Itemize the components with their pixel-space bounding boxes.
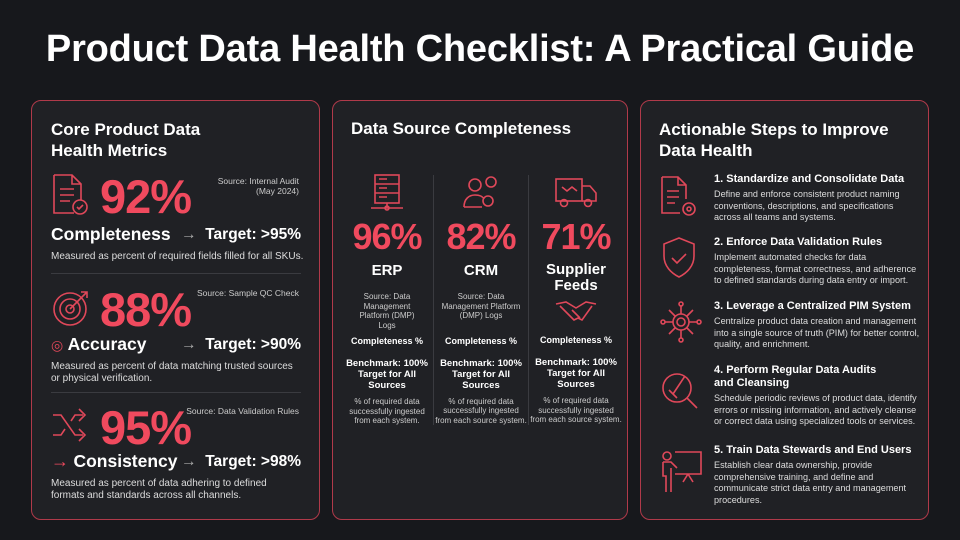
column: supplier feeds: Completeness % <box>540 335 612 345</box>
step 2 <box>663 236 916 285</box>
step 1 <box>661 173 904 222</box>
icon: shuffle <box>53 408 86 442</box>
column: CRM: Completeness % <box>445 336 517 346</box>
label: completeness: → Target: >95% <box>181 226 301 242</box>
heading: steps: Data Health <box>659 141 753 160</box>
column: supplier feeds: Supplier <box>546 261 606 278</box>
column: CRM: Benchmark: 100% <box>440 358 522 368</box>
column: CRM: Source: Data <box>458 292 504 301</box>
column: ERP: Completeness % <box>351 336 423 346</box>
label: completeness: Completeness <box>51 224 171 244</box>
heading: core metrics <box>51 120 200 160</box>
icon: truck <box>555 178 597 208</box>
step 5: Establish clear data ownership, provide comprehensive training, and define and communicate strict data entry and management procedures. <box>714 460 906 504</box>
label: accuracy: ◎ Accuracy <box>51 334 146 354</box>
desc: consistency: Measured as percent of data adhering to defined formats and standards across all channels. <box>51 478 267 501</box>
icon: document check <box>53 174 88 215</box>
panel: core metrics <box>31 100 320 520</box>
label: accuracy <box>51 334 301 354</box>
step 4: and Cleansing <box>714 377 789 389</box>
icon: target <box>53 291 88 326</box>
label: accuracy: → Target: >90% <box>181 336 301 352</box>
step 5 <box>662 444 912 505</box>
heading: steps: Actionable Steps to Improve <box>659 120 889 139</box>
column: CRM: (DMP) Logs <box>460 311 502 320</box>
source: internal audit: Source: Internal Audit <box>218 176 299 186</box>
title: Product Data Health Checklist: A Practical Guide <box>46 28 914 70</box>
label: completeness <box>51 224 301 244</box>
step 1: 1. Standardize and Consolidate Data <box>714 173 904 185</box>
column: ERP: Logs <box>378 320 396 330</box>
column: ERP: Target for All <box>358 369 416 380</box>
label: consistency <box>51 451 301 471</box>
column: supplier feeds: % of required data successfully ingested from each source system. <box>530 396 622 424</box>
column: CRM <box>435 176 527 424</box>
step 4 <box>662 364 917 426</box>
column: supplier feeds: Target for All <box>547 368 605 379</box>
step 5: 5. Train Data Stewards and End Users <box>714 444 911 456</box>
heading: core metrics: Health Metrics <box>51 141 167 160</box>
panel: actionable steps <box>640 100 929 520</box>
column: supplier feeds: 71% <box>541 216 611 257</box>
column: ERP: Platform (DMP) <box>359 311 415 320</box>
label: consistency: → Target: >98% <box>181 452 301 470</box>
column: supplier feeds: Sources <box>557 379 595 390</box>
column: ERP <box>346 174 428 425</box>
step 3: Centralize product data creation and management into a single source of truth (PIM) for better control, quality, and enrichment. <box>714 316 919 349</box>
step 3: 3. Leverage a Centralized PIM System <box>714 300 911 312</box>
column: CRM: Target for All <box>452 368 510 380</box>
step 3 <box>660 300 919 349</box>
label: consistency: → Consistency <box>51 451 178 471</box>
column: ERP: Source: Data <box>364 292 410 301</box>
step 4: 4. Perform Regular Data Audits <box>714 364 876 376</box>
column: CRM: CRM <box>464 262 498 279</box>
column: ERP: Management <box>364 302 410 310</box>
column: supplier feeds: Benchmark: 100% <box>535 357 617 368</box>
column: supplier feeds: Feeds <box>554 277 598 294</box>
column: ERP: 96% <box>352 216 422 257</box>
step 1: Define and enforce consistent product naming conventions, descriptions, and specifications across all teams and systems. <box>714 189 900 222</box>
step 4: Schedule periodic reviews of product data, identify errors or missing information, and actively cleanse or correct data using specialized tools or services. <box>714 393 917 426</box>
column: CRM: % of required data successfully ingested from each source system. <box>435 396 527 424</box>
heading: data source: Data Source Completeness <box>351 119 571 138</box>
heading: steps <box>659 120 889 160</box>
metric: 92%: 92% <box>100 170 191 223</box>
desc: accuracy: Measured as percent of data matching trusted sources or physical verification. <box>51 361 293 384</box>
source: internal audit <box>218 176 299 196</box>
step 2: Implement automated checks for data completeness, format correctness, and adherence to defined standards during data entry or import. <box>714 252 916 285</box>
metric: 95%: 95% <box>100 401 191 454</box>
source: validation rules: Source: Data Validation Rules <box>186 406 299 416</box>
column: ERP: Benchmark: 100% <box>346 358 428 369</box>
source: internal audit: (May 2024) <box>256 186 299 196</box>
column: CRM: Management Platform <box>442 302 520 310</box>
heading: core metrics: Core Product Data <box>51 120 200 139</box>
desc: completeness: Measured as percent of required fields filled for all SKUs. <box>51 251 303 262</box>
icon: server <box>371 174 403 211</box>
column: ERP: % of required data successfully ingested from each system. <box>349 397 425 425</box>
column: ERP: ERP <box>372 262 402 279</box>
column: ERP: Sources <box>368 380 406 391</box>
source: sample qc: Source: Sample QC Check <box>197 288 299 298</box>
panel: data source completeness <box>332 100 628 520</box>
column: CRM: 82% <box>446 216 516 257</box>
column: supplier feeds <box>530 178 622 424</box>
step 2: 2. Enforce Data Validation Rules <box>714 236 882 248</box>
metric: 88%: 88% <box>100 283 191 336</box>
column: CRM: Sources <box>462 380 500 390</box>
icon: handshake <box>556 301 596 321</box>
icon: user gears <box>463 176 497 208</box>
